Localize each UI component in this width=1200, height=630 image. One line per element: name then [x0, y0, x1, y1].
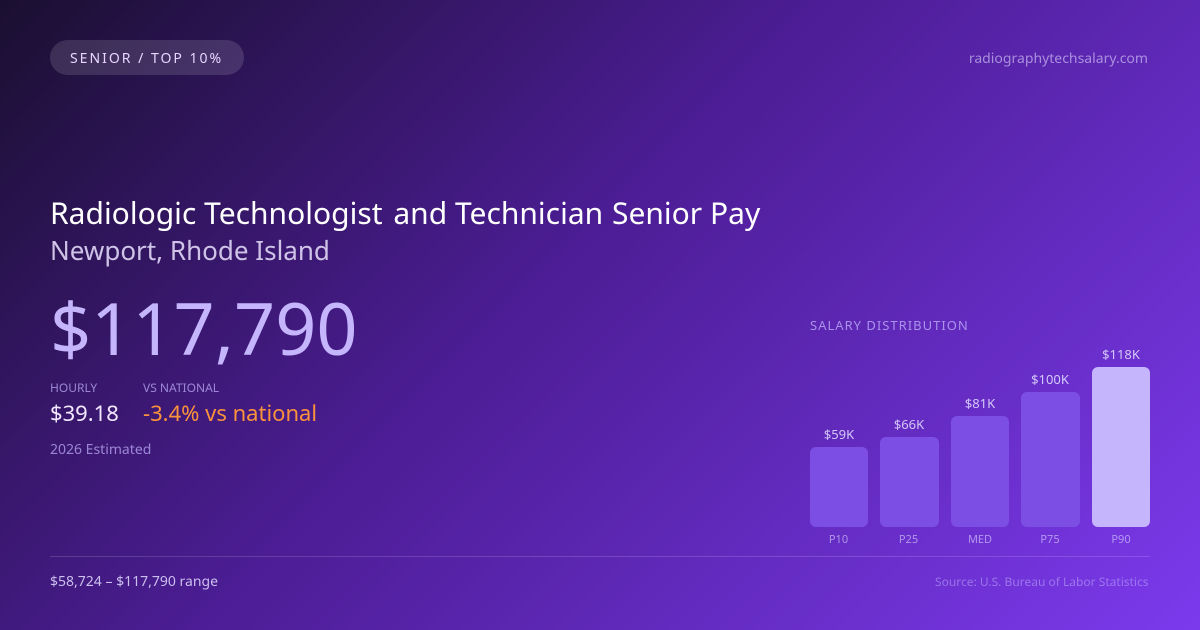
vs national stat — [143, 379, 317, 428]
bar P10: P10 — [829, 532, 848, 547]
location subtitle: Newport, Rhode Island — [50, 232, 330, 268]
bar P10: $59K — [824, 425, 854, 443]
bar P25: $66K — [894, 415, 924, 433]
bar chart: salary distribution — [810, 345, 1150, 547]
chart heading: SALARY DISTRIBUTION — [810, 316, 969, 334]
badge: senior / top 10% — [50, 40, 244, 75]
bar median: $81K — [965, 394, 995, 412]
hourly stat: $39.18 — [50, 398, 119, 428]
hourly stat: HOURLY — [50, 379, 97, 396]
estimate note: 2026 Estimated — [50, 440, 151, 459]
bar P75: $100K — [1031, 370, 1069, 388]
title: Radiologic Technologist and Technician Senior Pay — [50, 192, 760, 233]
main salary figure: $117,790 — [50, 279, 358, 377]
source: Source: U.S. Bureau of Labor Statistics — [935, 573, 1148, 590]
bar P90: P90 — [1111, 532, 1131, 547]
bar P10 — [810, 425, 868, 547]
bar median: MED — [968, 532, 992, 547]
bar median — [951, 394, 1009, 547]
hourly stat — [50, 379, 119, 428]
bar P25 — [880, 415, 939, 547]
badge: senior / top 10%: SENIOR / TOP 10% — [70, 49, 223, 68]
bar P75: P75 — [1040, 532, 1060, 547]
bar P90: $118K — [1102, 345, 1140, 363]
bar P25: P25 — [899, 532, 918, 547]
vs national stat: -3.4% vs national — [143, 398, 317, 428]
salary range: $58,724 – $117,790 range — [50, 572, 218, 591]
bar P90 — [1092, 345, 1150, 547]
site domain: radiographytechsalary.com — [969, 49, 1148, 68]
bar P75 — [1021, 370, 1080, 547]
vs national stat: VS NATIONAL — [143, 379, 219, 396]
